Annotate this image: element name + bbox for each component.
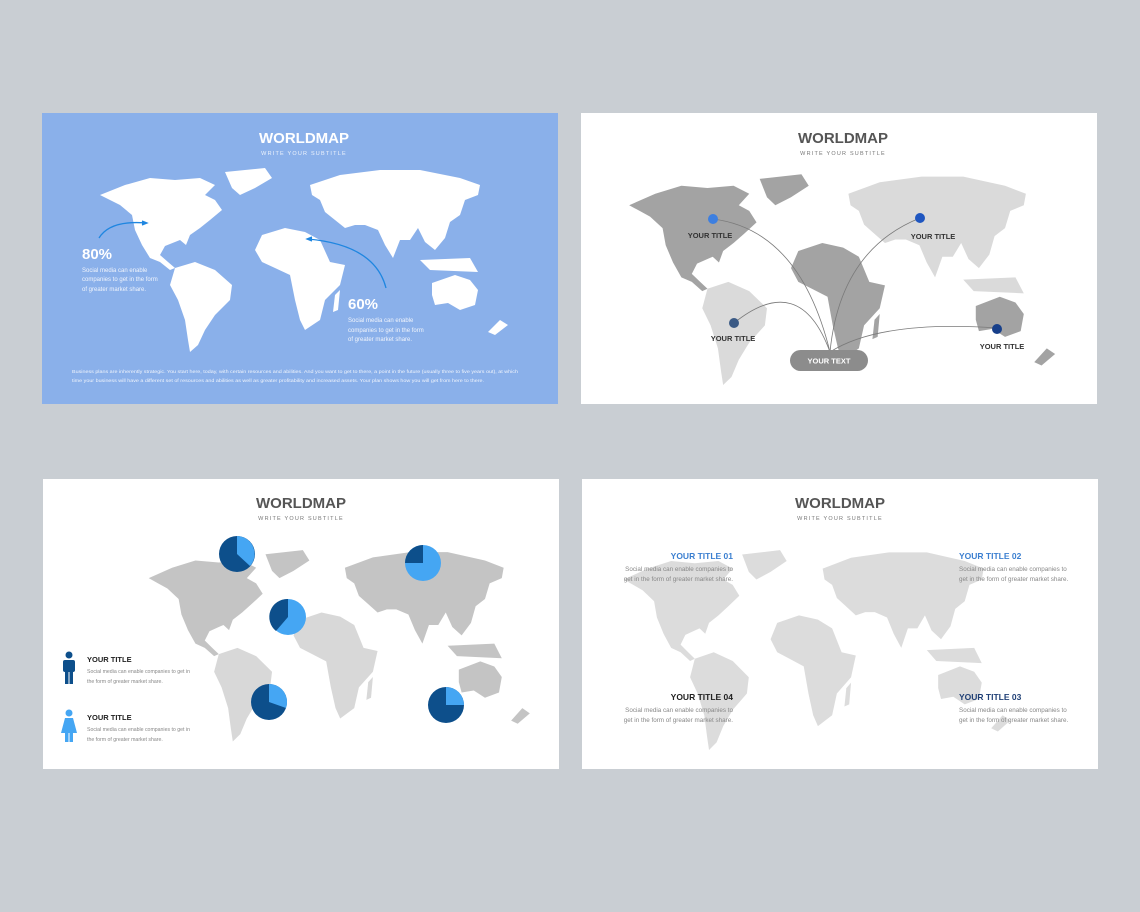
title: WORLDMAP [259,130,349,147]
world map white [100,168,508,352]
panel: slide 1 blue world map [42,113,558,404]
stat 60%: Social media can enable [348,318,414,324]
subtitle: WRITE YOUR SUBTITLE [258,516,344,522]
subtitle: WRITE YOUR SUBTITLE [261,151,347,157]
text block 04: Social media can enable companies to [625,707,733,714]
text block 04: get in the form of greater market share. [624,717,733,724]
paragraph: time your business will have a different set of resources and abilities as well as greater profitability and increased assets. Your plan shows how you will get from here to there. [72,378,484,383]
legend item 1: the form of greater market share. [87,679,163,685]
text block 01: YOUR TITLE 01 [671,551,733,561]
text block 03 [959,692,1068,724]
text block 01: get in the form of greater market share. [624,576,733,583]
text block 02: YOUR TITLE 02 [959,551,1022,561]
text block 03: YOUR TITLE 03 [959,692,1022,702]
text block 04 [624,692,733,724]
panel: slide 4 titles map [582,479,1098,769]
stat 80%: Social media can enable [82,268,148,274]
stat 60%: of greater market share. [348,337,412,343]
paragraph [72,369,519,383]
arrow: 60% [307,237,386,288]
markers and labels [688,213,1024,351]
world map light [624,550,1010,750]
subtitle: WRITE YOUR SUBTITLE [800,151,886,157]
panel: slide 2 connections map [581,113,1097,404]
title: WORLDMAP [798,130,888,147]
pill: your text [790,350,868,371]
legend item 1 [87,655,190,685]
legend item 2: the form of greater market share. [87,737,163,743]
arrow: 80% [99,221,147,238]
stat 60%: 60% [348,296,378,313]
stat 80% [82,246,158,293]
text block 02: get in the form of greater market share. [959,576,1068,583]
icon: woman [61,710,77,742]
markers and labels: YOUR TITLE [980,342,1024,351]
legend item 1: YOUR TITLE [87,655,132,664]
legend item 2: YOUR TITLE [87,713,132,722]
pie charts [219,536,464,723]
stat 80%: of greater market share. [82,287,146,293]
panel: slide 3 pie map [43,479,559,769]
icon: man [63,652,75,684]
stat 80%: companies to get in the form [82,277,158,283]
text block 04: YOUR TITLE 04 [671,692,733,702]
text block 02 [959,551,1068,583]
legend item 2: Social media can enable companies to get in [87,727,190,733]
connection lines [713,218,997,352]
pill: your text: YOUR TEXT [808,356,851,366]
title: WORLDMAP [795,495,885,512]
stat 60%: companies to get in the form [348,328,424,334]
paragraph: Business plans are inherently strategic. You start here, today, with certain resources and abilities. And you want to get to there, a point in the future (usually three to five years out), at which [72,369,519,374]
world map [149,550,530,741]
text block 01 [624,551,733,583]
text block 01: Social media can enable companies to [625,566,733,573]
subtitle: WRITE YOUR SUBTITLE [797,516,883,522]
markers and labels: YOUR TITLE [688,231,732,240]
legend item 2 [87,713,190,743]
stat 80%: 80% [82,246,112,263]
legend item 1: Social media can enable companies to get in [87,669,190,675]
text block 02: Social media can enable companies to [959,566,1067,573]
text block 03: get in the form of greater market share. [959,717,1068,724]
title: WORLDMAP [256,495,346,512]
text block 03: Social media can enable companies to [959,707,1067,714]
markers and labels: YOUR TITLE [911,232,955,241]
world map grey [629,174,1055,385]
markers and labels: YOUR TITLE [711,334,755,343]
stat 60% [348,296,424,343]
